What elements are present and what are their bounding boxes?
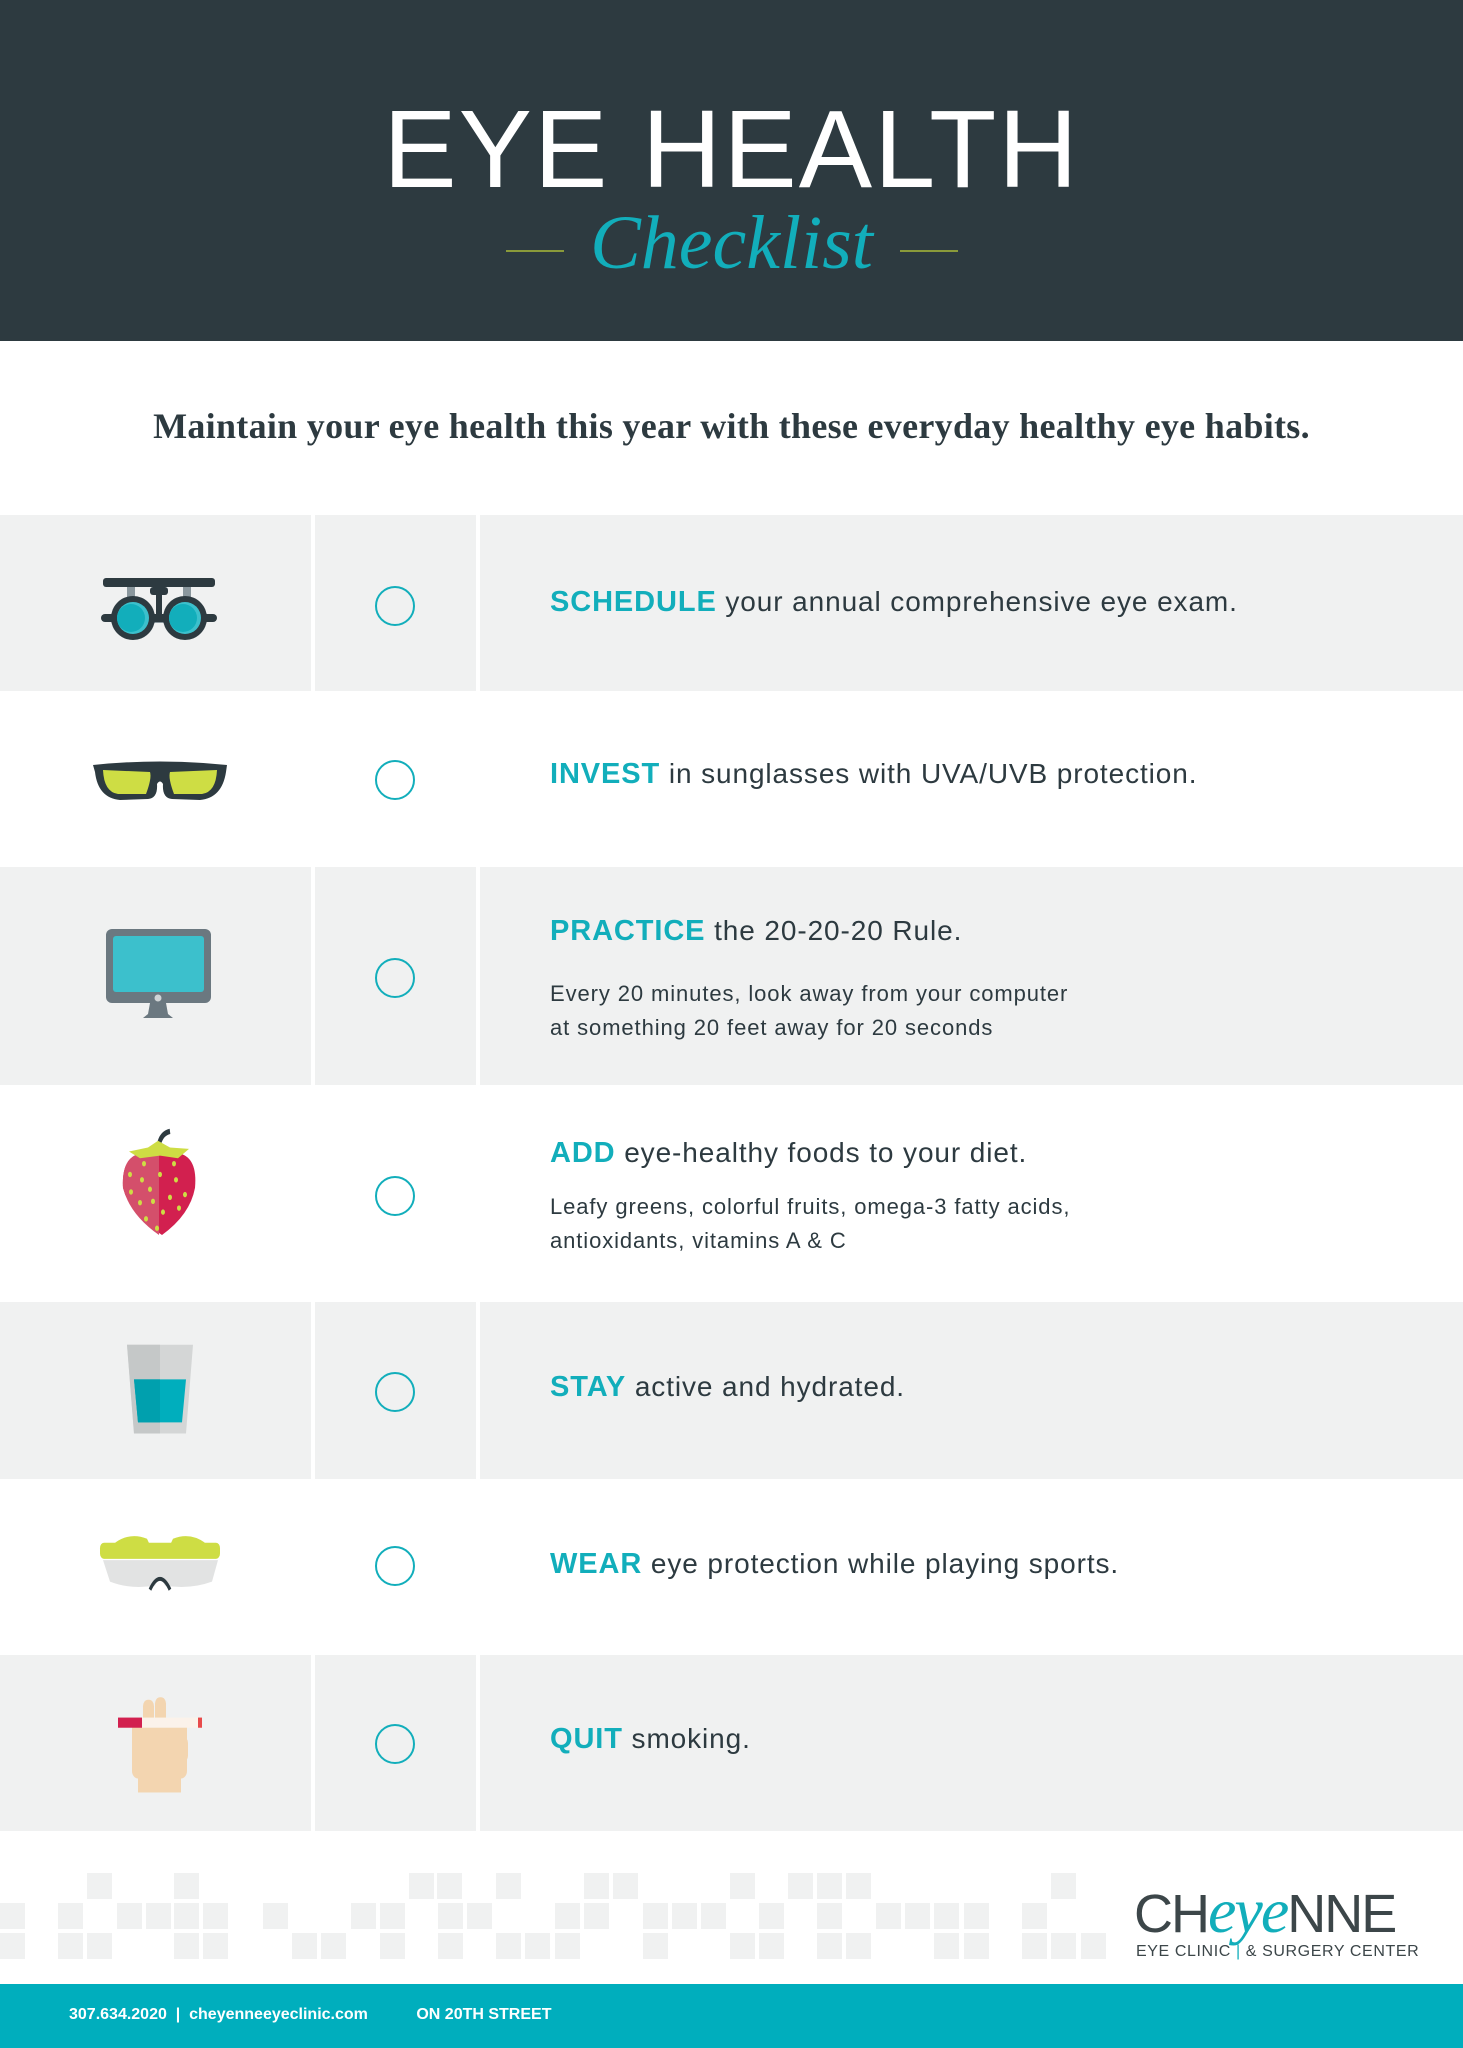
text 4: ADD eye-healthy foods to your diet. — [550, 1137, 1027, 1169]
footer pattern — [0, 1873, 1106, 1959]
row 7 — [0, 1655, 1463, 1831]
logo: EYE CLINIC | & SURGERY CENTER — [1136, 1943, 1419, 1960]
row 6 — [0, 1479, 1463, 1655]
row 1 — [0, 515, 1463, 691]
text 3: PRACTICE the 20-20-20 Rule. — [550, 915, 962, 947]
icon: monitor — [106, 929, 211, 1018]
title: EYE HEALTH — [383, 88, 1080, 211]
checkbox 7 — [375, 1724, 415, 1764]
icon: sunglasses — [93, 762, 227, 800]
subtitle: Checklist: Checklist — [590, 201, 873, 285]
text 5: STAY active and hydrated. — [550, 1371, 905, 1403]
text: Leafy greens, colorful fruits, omega-3 fatty acids, — [550, 1194, 1070, 1219]
header — [0, 0, 1463, 341]
icon: sports goggles — [100, 1536, 220, 1591]
icon: trial frame — [101, 578, 217, 640]
text 1: SCHEDULE your annual comprehensive eye exam. — [550, 586, 1238, 618]
row 3 — [0, 867, 1463, 1085]
icon: strawberry — [122, 1128, 196, 1235]
icon: hand with cigarette — [118, 1697, 202, 1792]
text: at something 20 feet away for 20 seconds — [550, 1015, 993, 1040]
checkbox 5 — [375, 1372, 415, 1412]
text 7: QUIT smoking. — [550, 1723, 751, 1755]
row 2 — [0, 691, 1463, 867]
checkbox 4 — [375, 1176, 415, 1216]
text: antioxidants, vitamins A & C — [550, 1228, 847, 1253]
intro text: Maintain your eye health this year with these everyday healthy eye habits. — [153, 406, 1310, 446]
checkbox 1 — [375, 586, 415, 626]
checkbox 2 — [375, 760, 415, 800]
text 2: INVEST in sunglasses with UVA/UVB protection. — [550, 758, 1197, 790]
row 4 — [0, 1085, 1463, 1302]
logo: CHeyeNNE — [1134, 1875, 1395, 1946]
icon: glass of water — [127, 1344, 193, 1434]
row 5 — [0, 1302, 1463, 1479]
checkbox 3 — [375, 958, 415, 998]
text: Every 20 minutes, look away from your computer — [550, 981, 1068, 1006]
checkbox 6 — [375, 1546, 415, 1586]
footer contact text: 307.634.2020 | cheyenneeyeclinic.com ON 20TH STREET — [69, 2006, 551, 2023]
text 6: WEAR eye protection while playing sports. — [550, 1548, 1119, 1580]
footer bar — [0, 1984, 1463, 2048]
